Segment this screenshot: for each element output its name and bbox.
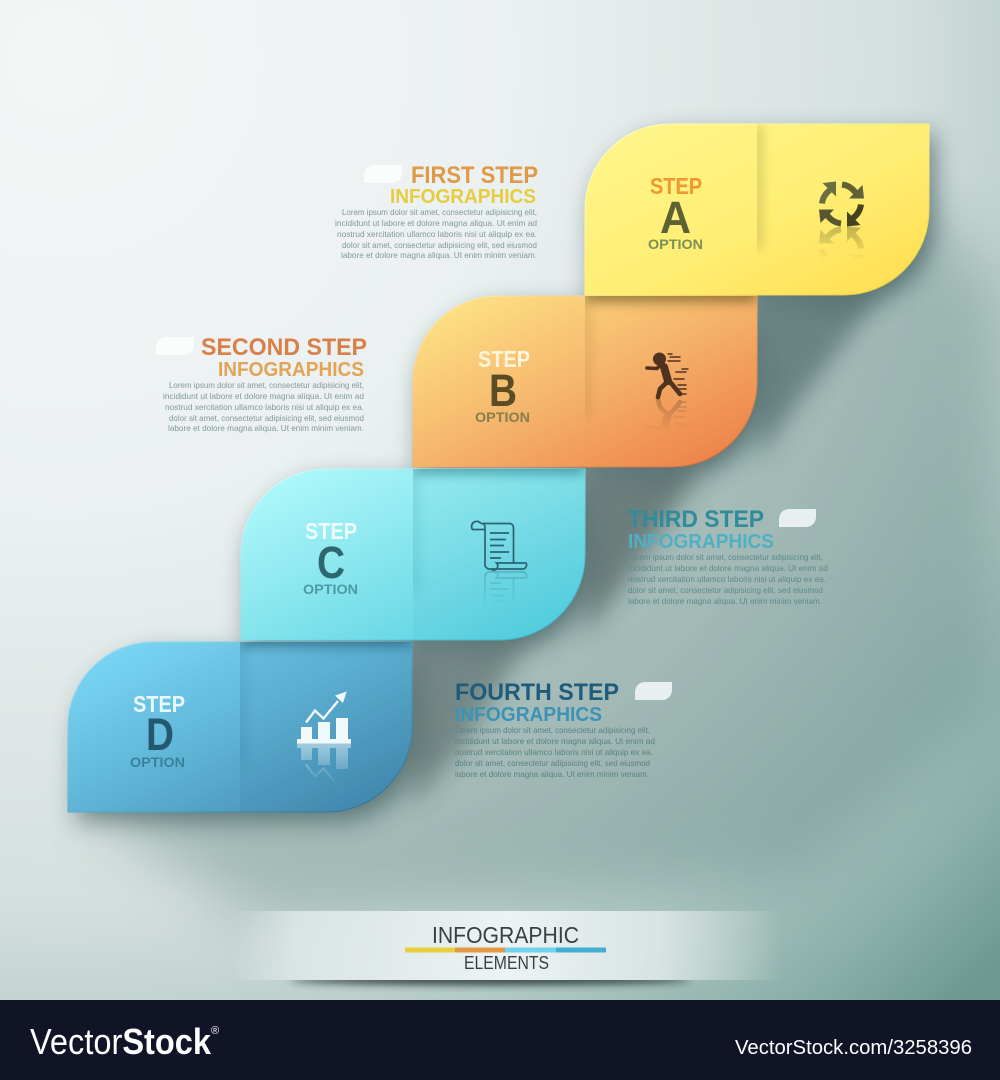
body text: third step: nostrud xercitation ullamco laboris nisi ut aliquip ex ea. [628, 574, 826, 584]
subheading: second step: INFOGRAPHICS [218, 359, 364, 381]
card shape A [585, 124, 929, 295]
body text: first step: dolor sit amet, consectetur adipisicing elit, sed eiusmod [342, 240, 537, 250]
icon: paper scroll [470, 520, 528, 600]
text block: second step [156, 334, 367, 433]
footer logo: VectorStock [30, 1021, 212, 1062]
body text: third step: incididunt ut labore et dolore magna aliqua. Ut enim ad [628, 563, 828, 573]
cast shadows behind steps [76, 134, 1000, 920]
tag: first step [364, 165, 402, 183]
body text: first step: nostrud xercitation ullamco laboris nisi ut aliquip ex ea. [337, 229, 537, 239]
card shading D [240, 642, 412, 770]
label: step B text: OPTION [475, 409, 530, 425]
text block: fourth step [455, 679, 672, 779]
heading: second step: SECOND STEP [201, 334, 367, 361]
body text: second step [163, 380, 364, 433]
heading: third step: THIRD STEP [628, 506, 764, 533]
body text: first step: incididunt ut labore et dolore magna aliqua. Ut enim ad [335, 218, 537, 228]
body text: fourth step: nostrud xercitation ullamco laboris nisi ut aliquip ex ea. [455, 747, 653, 757]
banner strip [232, 911, 782, 980]
icon: rising bar chart [297, 692, 351, 782]
body text: first step: Lorem ipsum dolor sit amet, consectetur adipisicing elit, [342, 207, 537, 217]
body text: second step: dolor sit amet, consectetur adipisicing elit, sed eiusmod [169, 413, 364, 423]
tag: second step [156, 337, 194, 355]
footer registered mark: ® [211, 1025, 219, 1037]
subheading: fourth step: INFOGRAPHICS [455, 704, 602, 726]
heading: fourth step: FOURTH STEP [455, 679, 619, 706]
body text: fourth step: incididunt ut labore et dolore magna aliqua. Ut enim ad [455, 736, 655, 746]
body text: third step: labore et dolore magna aliqua. Ut enim minim veniam. [628, 596, 822, 606]
panel: step C [241, 459, 585, 640]
body text: fourth step: dolor sit amet, consectetur adipisicing elit, sed eiusmod [455, 758, 650, 768]
banner title: INFOGRAPHIC [432, 922, 579, 948]
label: step A text: OPTION [648, 236, 703, 252]
body text: third step: dolor sit amet, consectetur adipisicing elit, sed eiusmod [628, 585, 823, 595]
tag: fourth step [635, 682, 672, 700]
label: step C text [303, 518, 358, 597]
body text: second step: nostrud xercitation ullamco laboris nisi ut aliquip ex ea. [165, 402, 364, 412]
label: step D text: D [146, 709, 174, 760]
card shape B [413, 296, 757, 467]
label: step B text [475, 346, 530, 425]
body text: third step: Lorem ipsum dolor sit amet, consectetur adipisicing elit, [628, 552, 823, 562]
body text: third step [628, 552, 828, 606]
body text: fourth step: Lorem ipsum dolor sit amet, consectetur adipisicing elit, [455, 725, 650, 735]
footer bar [0, 1000, 1000, 1080]
card shading B [583, 286, 757, 416]
label: step D text: OPTION [130, 754, 185, 770]
body text: first step [335, 207, 537, 260]
label: step A text [648, 173, 703, 252]
title banner [232, 911, 782, 985]
label: step D text [130, 691, 185, 770]
card shading A [755, 124, 760, 249]
icon: running man [645, 352, 689, 426]
body text: fourth step: labore et dolore magna aliqua. Ut enim minim veniam. [455, 769, 649, 779]
icon: circular arrows [819, 182, 864, 255]
body text: second step: Lorem ipsum dolor sit amet, consectetur adipisicing elit, [169, 380, 364, 390]
colour bar [405, 948, 606, 952]
body text: second step: labore et dolore magna aliqua. Ut enim minim veniam. [168, 423, 364, 433]
panel: step A [585, 124, 929, 295]
text block: first step [335, 162, 538, 260]
banner subtitle: ELEMENTS [464, 953, 549, 973]
card shape C [241, 469, 585, 640]
label: step C text: C [317, 537, 345, 588]
body text: fourth step [455, 725, 655, 779]
label: step B text: STEP [478, 346, 530, 372]
label: step C text: OPTION [303, 581, 358, 597]
label: step A text: STEP [650, 173, 702, 199]
subheading: third step: INFOGRAPHICS [628, 531, 774, 553]
text block: third step [628, 506, 828, 606]
panel: step D [68, 632, 412, 812]
body text: second step: incididunt ut labore et dolore magna aliqua. Ut enim ad [163, 391, 364, 401]
footer url: VectorStock.com/3258396 [735, 1037, 972, 1059]
banner shadow [290, 975, 690, 985]
label: step C text: STEP [305, 518, 357, 544]
subheading: first step: INFOGRAPHICS [390, 186, 536, 208]
label: step B text: B [489, 365, 517, 416]
card shape D [68, 642, 412, 812]
panel: step B [413, 286, 757, 467]
body text: first step: labore et dolore magna aliqua. Ut enim minim veniam. [341, 250, 537, 260]
tag: third step [779, 509, 816, 527]
label: step A text: A [660, 192, 691, 243]
label: step D text: STEP [133, 691, 185, 717]
card shading C [413, 469, 585, 598]
heading: first step: FIRST STEP [411, 162, 538, 189]
